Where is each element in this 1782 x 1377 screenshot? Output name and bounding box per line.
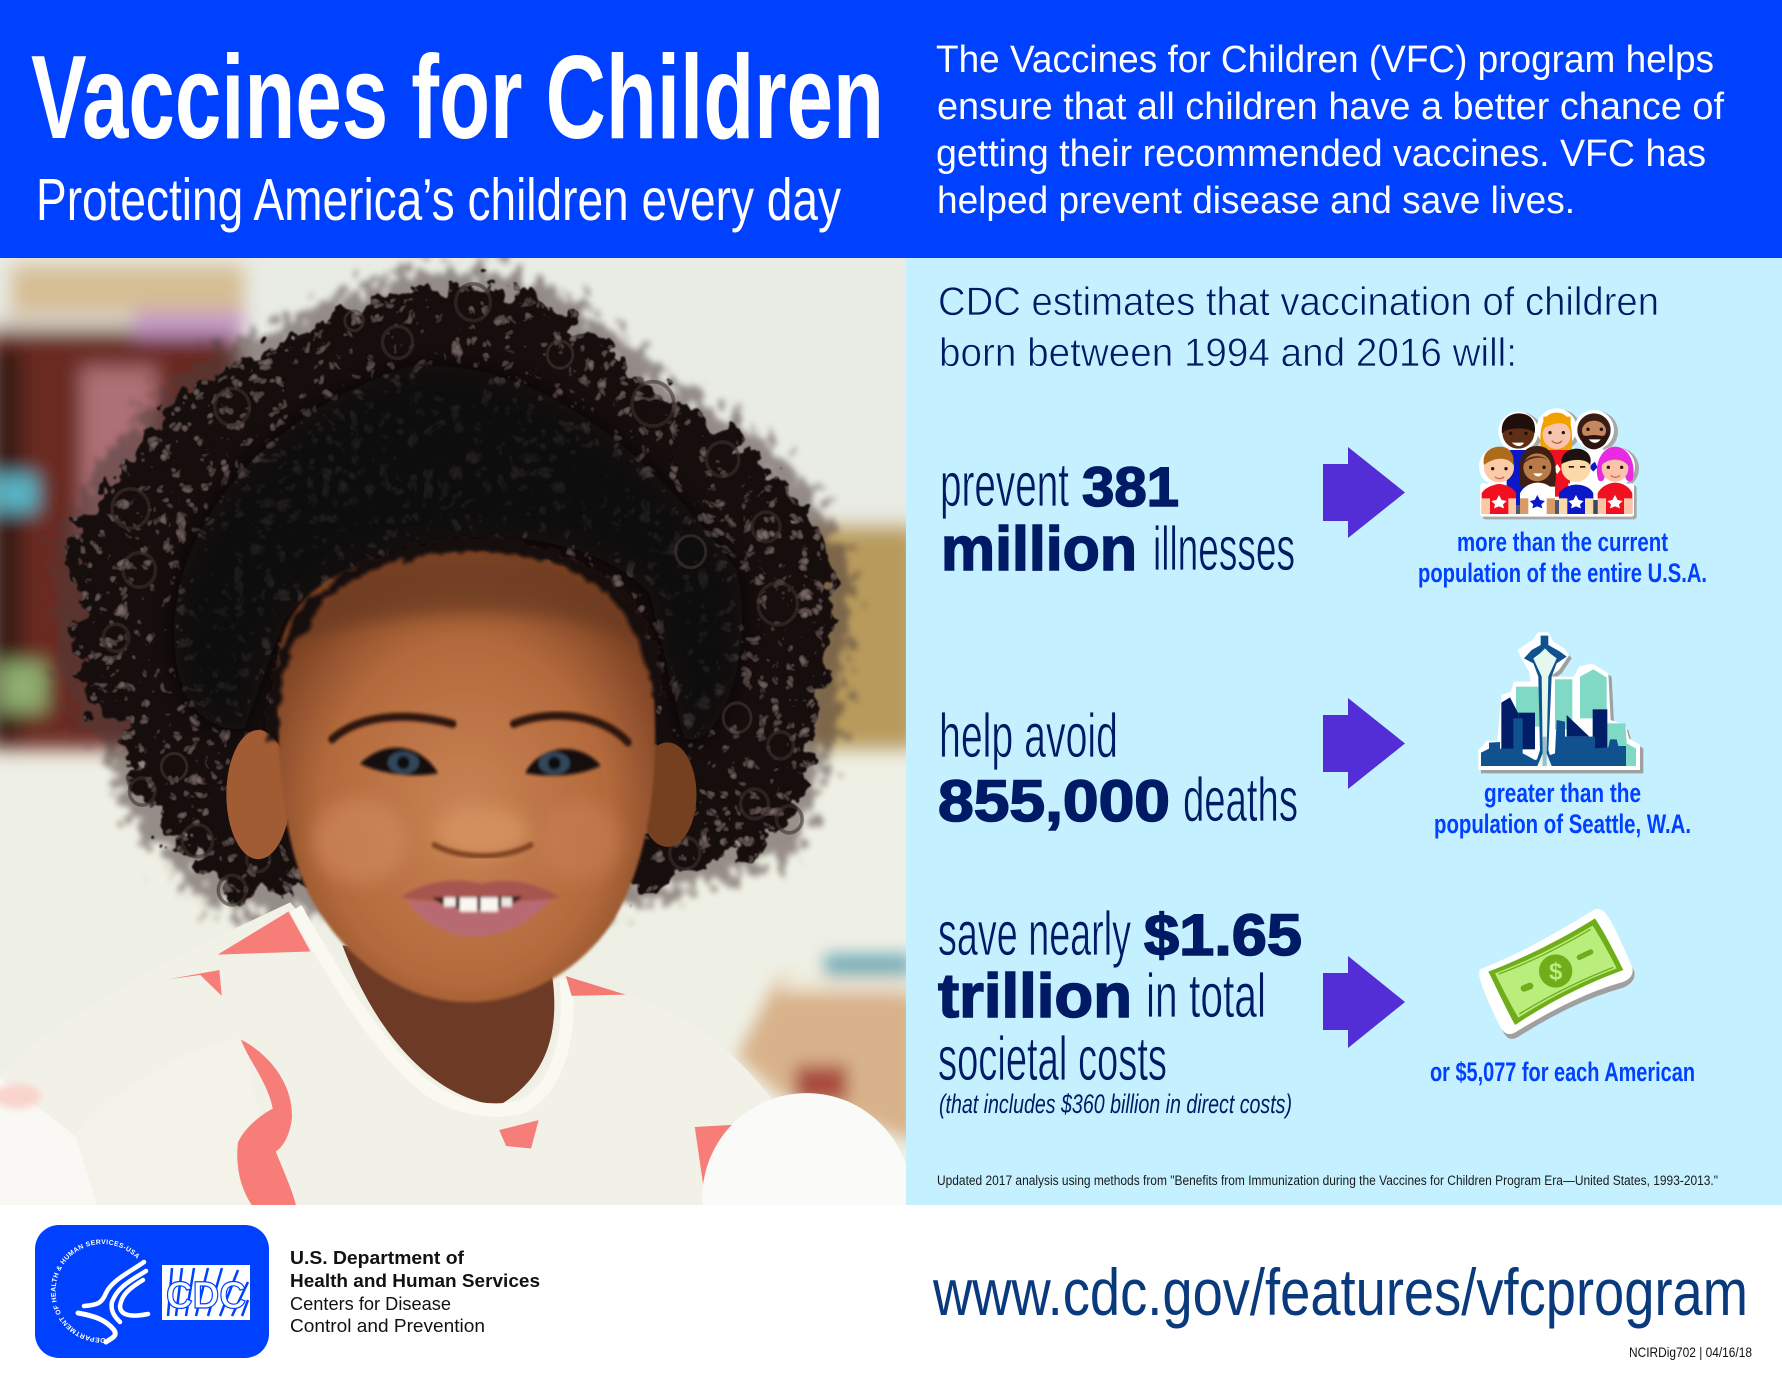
shirt bbox=[0, 902, 775, 1210]
stat: $1.65 trillion: $1.65 bbox=[1144, 903, 1302, 968]
stat: $1.65 trillion: save nearly bbox=[938, 900, 1131, 969]
bearded man bbox=[1577, 413, 1611, 449]
header band bbox=[0, 0, 1782, 258]
publication code: NCIRDig702 | 04/16/18 bbox=[1629, 1344, 1752, 1360]
arrow 1 bbox=[1323, 447, 1405, 538]
stat: 381 million illnesses: million bbox=[941, 515, 1137, 584]
logo: HHS and CDC bbox=[35, 1225, 269, 1358]
stat: 855,000 deaths: help avoid bbox=[939, 702, 1118, 771]
seal text: DEPARTMENT OF HEALTH & HUMAN SERVICES-USA bbox=[50, 1239, 139, 1343]
dark core bbox=[174, 366, 742, 742]
stat: $1.65 trillion: societal costs bbox=[938, 1025, 1167, 1094]
stat: $1.65 trillion: trillion bbox=[938, 962, 1132, 1031]
stat: $1.65 trillion bbox=[938, 900, 1302, 1119]
subtitle: Protecting America’s children every day bbox=[36, 167, 841, 233]
stat: 855,000 deaths: deaths bbox=[1183, 766, 1298, 835]
eagle bbox=[78, 1262, 148, 1342]
panel heading: born between 1994 and 2016 will: bbox=[939, 331, 1517, 375]
green bill bbox=[1488, 918, 1623, 1025]
girl with long dark hair bbox=[1519, 446, 1556, 514]
panel: light blue statistics bbox=[906, 258, 1782, 1205]
panel heading: CDC estimates that vaccination of children bbox=[938, 280, 1659, 324]
caption: Seattle population bbox=[1434, 778, 1691, 839]
stat: 855,000 deaths: 855,000 bbox=[938, 769, 1170, 834]
arrow 3 bbox=[1323, 956, 1405, 1048]
stat: $1.65 trillion: in total bbox=[1146, 962, 1266, 1031]
stat: 381 million illnesses: prevent bbox=[940, 451, 1069, 520]
arrow 2 bbox=[1323, 698, 1405, 789]
space needle bbox=[1524, 636, 1567, 766]
sticker base bbox=[1479, 408, 1639, 519]
girl with pink hair bbox=[1597, 447, 1634, 514]
smile bbox=[400, 881, 560, 937]
nose bbox=[432, 807, 533, 856]
stat: $1.65 trillion: (that includes $360 billion in direct costs) bbox=[939, 1089, 1292, 1119]
header intro text bbox=[936, 39, 1724, 222]
header intro text: ensure that all children have a better chance of bbox=[937, 86, 1724, 128]
agency text bbox=[290, 1247, 540, 1336]
stat: 381 million illnesses: illnesses bbox=[1153, 515, 1295, 584]
bill shadow and outline bbox=[1482, 916, 1634, 1038]
blue foreground bbox=[1481, 718, 1626, 766]
caption: more than USA population: more than the current bbox=[1457, 527, 1668, 557]
skyline sticker outline bbox=[1478, 632, 1643, 773]
navy towers bbox=[1501, 697, 1607, 753]
photo background bbox=[0, 258, 917, 1210]
hair bbox=[55, 268, 851, 917]
hairline fringe bbox=[272, 544, 658, 742]
boy with black hair bbox=[1559, 449, 1593, 514]
agency text: U.S. Department of bbox=[290, 1247, 465, 1268]
eyebrows bbox=[332, 716, 628, 742]
white blanket bbox=[702, 1093, 906, 1205]
caption: Seattle population: population of Seattle, W.A. bbox=[1434, 809, 1691, 839]
woman with yellow hair bbox=[1540, 413, 1572, 450]
stat: 855,000 deaths bbox=[938, 702, 1298, 835]
title: Vaccines for Children bbox=[31, 31, 884, 164]
curls bbox=[103, 284, 802, 905]
caption: Seattle population: greater than the bbox=[1484, 778, 1641, 808]
icon: Seattle skyline bbox=[1478, 632, 1643, 773]
header intro text: getting their recommended vaccines. VFC has bbox=[936, 133, 1706, 175]
man with dark skin bbox=[1502, 413, 1535, 449]
green bill: $ bbox=[1549, 958, 1562, 985]
face bbox=[272, 544, 658, 1002]
agency text: Control and Prevention bbox=[290, 1315, 485, 1336]
wispy halo bbox=[55, 268, 851, 917]
eyes bbox=[360, 748, 601, 776]
header intro text: The Vaccines for Children (VFC) program helps bbox=[936, 39, 1714, 81]
footer background bbox=[0, 1205, 1782, 1377]
CDC box: CDC bbox=[166, 1275, 246, 1317]
ears bbox=[226, 730, 696, 859]
main mass bbox=[76, 284, 833, 896]
agency text: Centers for Disease bbox=[290, 1293, 451, 1314]
boy with brown hair bbox=[1482, 447, 1516, 514]
teal towers bbox=[1516, 669, 1636, 766]
photo: smiling toddler bbox=[0, 258, 906, 1205]
icon: group of people bbox=[1479, 408, 1639, 519]
caption: more than USA population bbox=[1418, 527, 1707, 588]
neck bbox=[342, 945, 554, 1105]
stat: 381 million illnesses: 381 bbox=[1082, 455, 1179, 518]
header intro text: helped prevent disease and save lives. bbox=[937, 180, 1575, 222]
agency text: Health and Human Services bbox=[290, 1270, 540, 1291]
stat: 381 million illnesses bbox=[940, 451, 1295, 584]
icon: dollar bill bbox=[1480, 909, 1634, 1038]
back row shirts bbox=[1507, 447, 1603, 514]
panel heading bbox=[938, 280, 1659, 375]
caption: per American: or $5,077 for each American bbox=[1430, 1057, 1695, 1087]
